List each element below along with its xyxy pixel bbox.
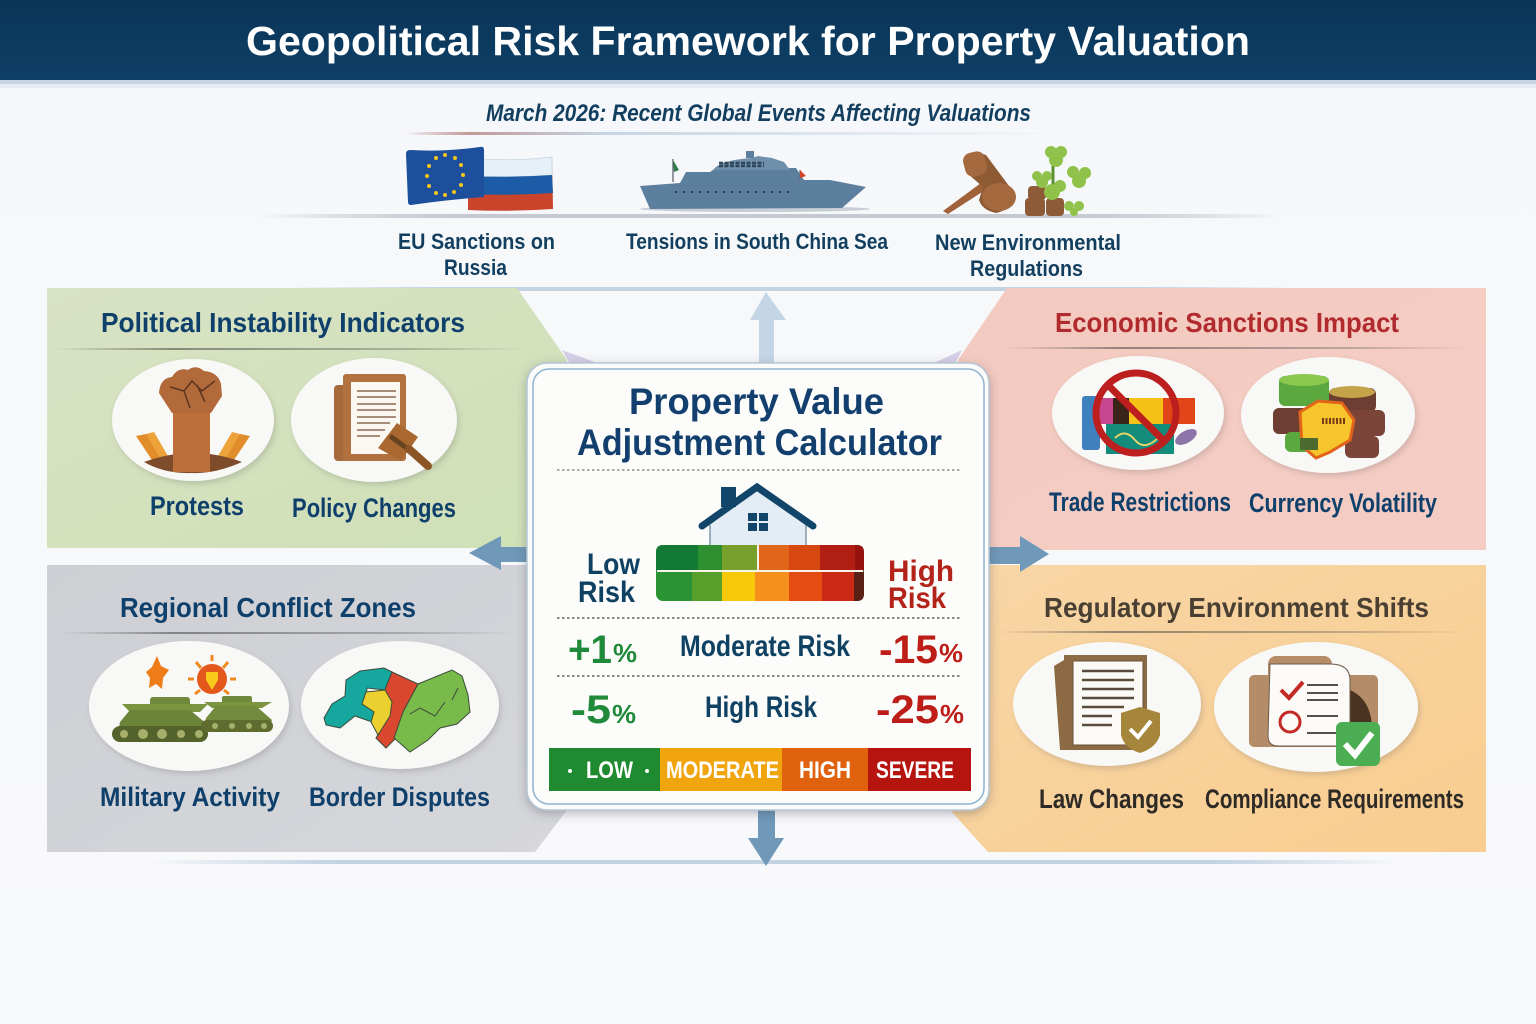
label: high risk: High <box>888 555 954 588</box>
row: high risk: -25 <box>876 688 939 732</box>
title: Geopolitical Risk Framework for Property Valuation <box>246 18 1250 64</box>
row: moderate risk: % <box>939 638 963 668</box>
connector: lavender wedges <box>562 350 962 364</box>
arrow: down <box>748 810 784 866</box>
arrow: right to panels <box>987 536 1049 572</box>
risk scale legend bar <box>549 748 971 791</box>
item label: trade restrictions: Trade Restrictions <box>1049 487 1231 517</box>
icon: gavel and plant <box>943 146 1091 216</box>
item label: compliance requirements: Compliance Requirements <box>1205 784 1464 814</box>
row: high risk: % <box>940 699 964 729</box>
calculator title: Property Value <box>629 381 884 422</box>
icon: policy book and gavel <box>334 374 428 466</box>
row: high risk: -5 <box>571 688 611 732</box>
risk scale legend bar: LOW <box>586 757 633 784</box>
section heading: recent events: March 2026: Recent Global Events Affecting Valuations <box>486 100 1031 127</box>
item label: protests: Protests <box>150 491 244 521</box>
row: moderate risk: +1 <box>568 628 612 672</box>
label: South China Sea: Tensions in South China Sea <box>626 229 889 254</box>
icon: EU and Russia flags <box>406 147 553 211</box>
icon: house <box>702 487 813 546</box>
icon: tanks and explosions <box>112 655 273 742</box>
label: EU sanctions: EU Sanctions on <box>398 229 555 254</box>
panel: economic sanctions <box>958 288 1486 550</box>
header banner <box>0 0 1536 88</box>
label: low risk <box>578 548 641 609</box>
row: moderate risk: Moderate Risk <box>680 630 850 663</box>
label: EU sanctions: Russia <box>444 255 508 280</box>
row: moderate risk: -15 <box>879 628 938 672</box>
item label: currency volatility: Currency Volatility <box>1249 488 1437 518</box>
arrow: left to panels <box>469 536 531 570</box>
calculator title <box>577 381 942 463</box>
panel: property value calculator <box>527 363 989 810</box>
label: environmental regulations: New Environmental <box>935 230 1121 255</box>
label: environmental regulations <box>935 230 1121 281</box>
risk scale legend bar: SEVERE <box>876 757 954 784</box>
label: low risk: Low <box>587 548 641 581</box>
item label: border disputes: Border Disputes <box>309 782 490 812</box>
icon: trade restrictions <box>1082 373 1199 454</box>
item label: policy changes: Policy Changes <box>292 493 456 523</box>
label: low risk: Risk <box>578 576 635 609</box>
label: EU sanctions <box>398 229 555 280</box>
panel: political instability <box>47 288 567 548</box>
risk scale legend bar: MODERATE <box>666 757 779 784</box>
row: moderate risk <box>568 628 963 672</box>
item label: law changes: Law Changes <box>1039 784 1184 814</box>
icon: law document with shield <box>1054 655 1160 753</box>
row: moderate risk: % <box>613 638 637 668</box>
item label: military activity: Military Activity <box>100 782 280 812</box>
label: high risk: Risk <box>888 582 946 615</box>
row: high risk: % <box>612 699 636 729</box>
panel heading: economic sanctions: Economic Sanctions Impact <box>1055 307 1399 338</box>
label: environmental regulations: Regulations <box>970 256 1083 281</box>
panel: regional conflict <box>47 565 567 852</box>
panel: regulatory environment <box>950 565 1486 852</box>
calculator title: Adjustment Calculator <box>577 422 942 463</box>
risk scale legend bar: HIGH <box>799 757 851 784</box>
panel heading: regional conflict: Regional Conflict Zones <box>120 592 416 623</box>
arrow: up to events <box>750 292 786 363</box>
icon: protest fist <box>136 367 250 473</box>
label: high risk <box>888 555 954 615</box>
icon: compliance checklist <box>1249 656 1380 766</box>
icon: currency stacks <box>1273 374 1385 458</box>
icon: border map <box>324 668 470 752</box>
risk gauge <box>656 545 864 601</box>
row: high risk: High Risk <box>705 691 817 724</box>
panel heading: political instability: Political Instability Indicators <box>101 307 465 338</box>
panel heading: regulatory environment: Regulatory Environment Shifts <box>1044 592 1429 623</box>
row: high risk <box>571 688 964 732</box>
icon: naval ship <box>640 151 870 212</box>
